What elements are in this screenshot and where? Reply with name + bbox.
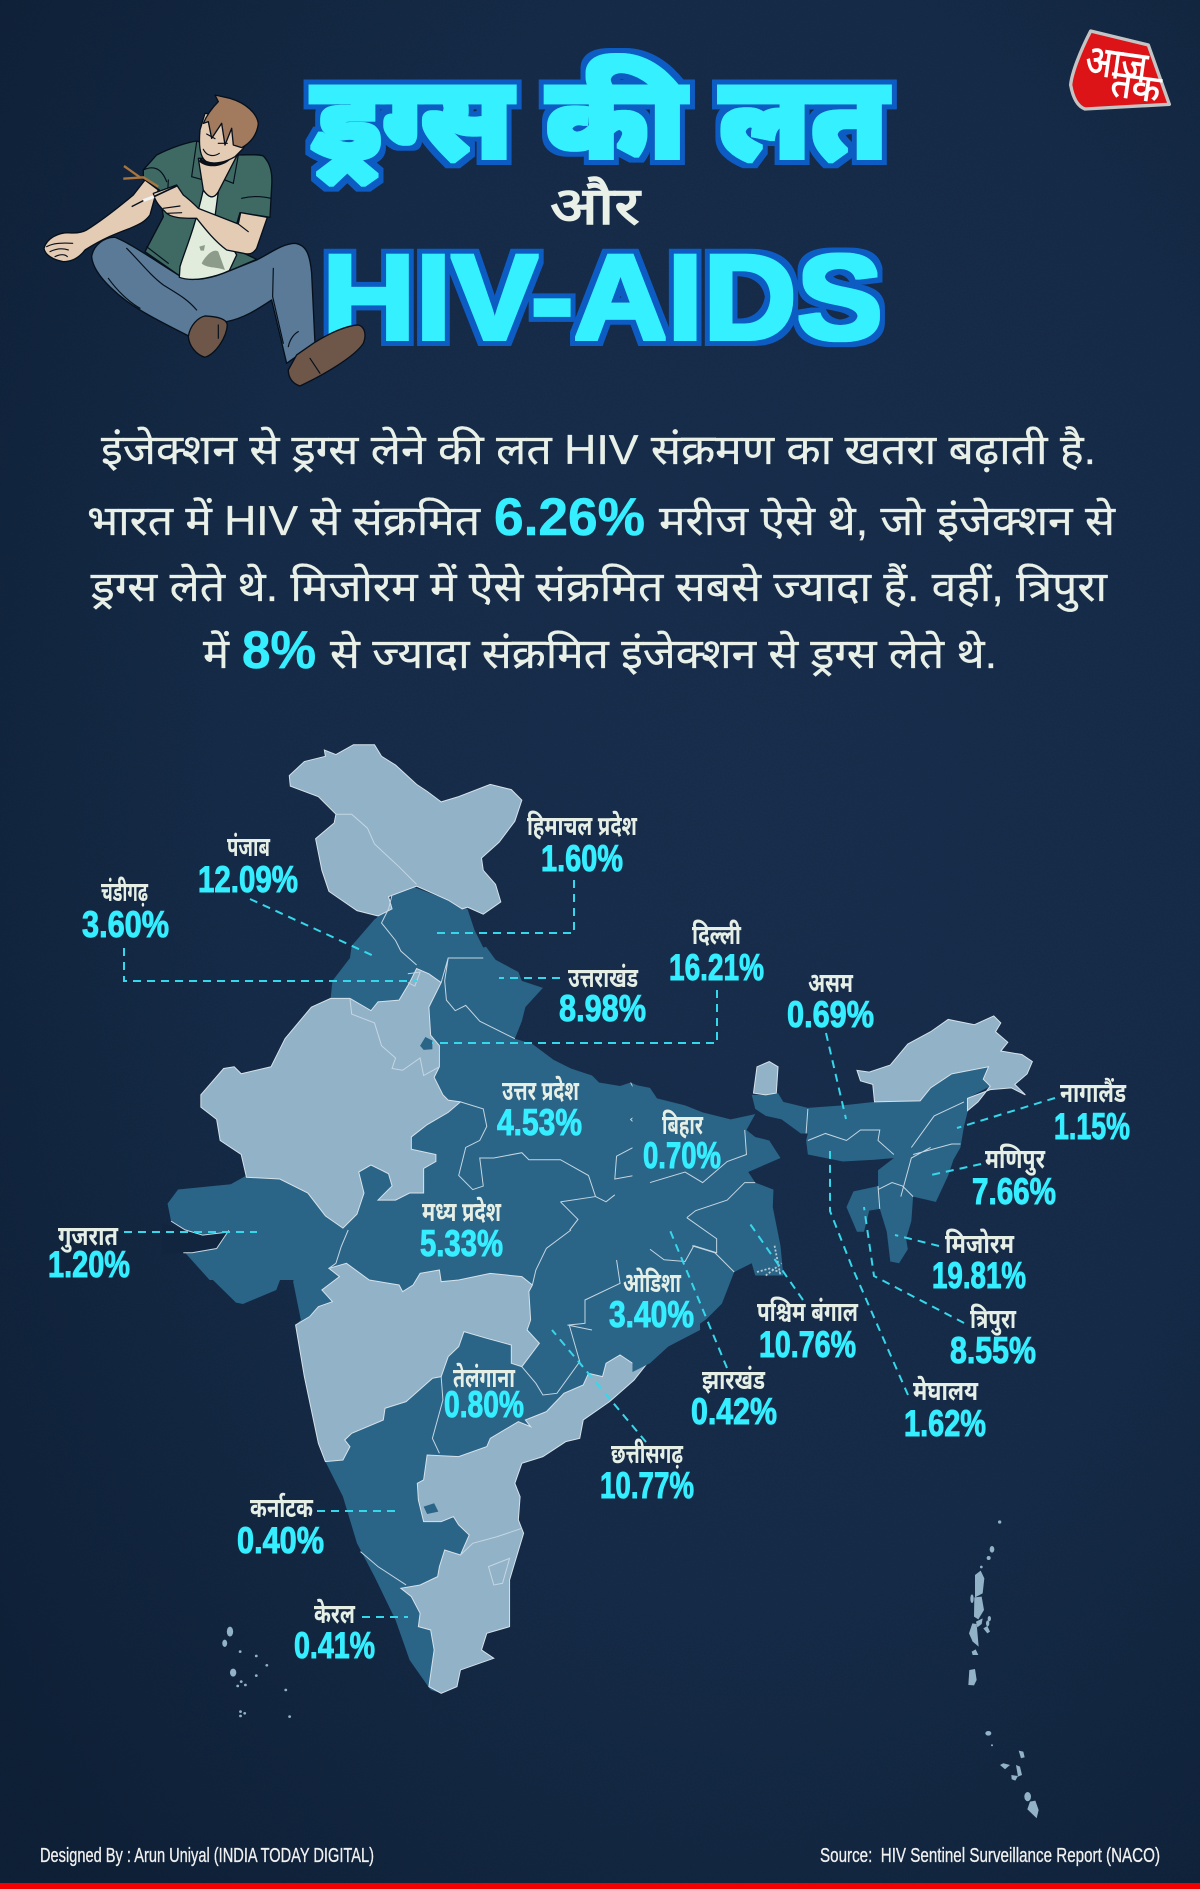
label: Uttarakhand: उत्तराखंड (568, 963, 638, 993)
label: Manipur (972, 1144, 1056, 1212)
label: Gujarat (48, 1221, 130, 1285)
collar shadow (199, 156, 233, 166)
label: Telangana (444, 1362, 524, 1425)
label: Himachal Pradesh: हिमाचल प्रदेश (527, 810, 637, 841)
logo word: Aaj: आज (1083, 36, 1151, 93)
syringe (132, 197, 153, 207)
label: Punjab: 12.09% (198, 859, 298, 900)
label: Delhi (669, 920, 764, 988)
light: Arunachal Pradesh (857, 1016, 1032, 1111)
label: Mizoram (932, 1229, 1026, 1296)
hand creases (163, 206, 248, 232)
label: West Bengal: पश्चिम बंगाल (757, 1297, 859, 1327)
label: Assam: असम (808, 968, 853, 998)
Delhi (420, 1037, 432, 1050)
label: Karnataka: कर्नाटक (250, 1492, 313, 1523)
label: Bihar (643, 1110, 721, 1176)
light: Sikkim (753, 1062, 778, 1095)
label: Himachal Pradesh: 1.60% (541, 838, 623, 879)
label: Uttar Pradesh (497, 1075, 582, 1143)
label: Chhattisgarh (600, 1439, 694, 1506)
fingers (47, 243, 73, 257)
title: HIV-AIDS: HIV-AIDS (322, 229, 883, 365)
label: Kerala: 0.41% (294, 1625, 375, 1666)
paragraph line 4: में (203, 630, 230, 677)
paragraph line 2: 6.26% (494, 488, 645, 547)
right shoe (288, 325, 365, 386)
arm with tourniquet (44, 180, 158, 262)
Sundarbans detail (757, 1246, 782, 1276)
label: Chhattisgarh: 10.77% (600, 1465, 694, 1506)
label: Mizoram: मिजोरम (945, 1229, 1014, 1259)
jeans folds (108, 248, 298, 347)
paragraph line 4: 8% (242, 621, 316, 680)
dark states: south (184, 1230, 700, 1718)
label: Delhi: दिल्ली (692, 920, 742, 950)
label: Manipur: मणिपुर (985, 1144, 1046, 1175)
neck (198, 155, 237, 197)
logo: Aaj Tak (1071, 31, 1169, 111)
label: Uttarakhand (559, 963, 646, 1029)
label: Gujarat: गुजरात (58, 1221, 119, 1252)
shirt details (143, 142, 271, 263)
label: Nagaland: नागालैंड (1060, 1077, 1126, 1108)
label: Himachal Pradesh (527, 810, 637, 879)
label: Madhya Pradesh (420, 1196, 503, 1264)
paragraph line 2 (87, 488, 1116, 547)
paragraph line 4: से ज्यादा संक्रमित इंजेक्शन से ड्रग्स लेते थे. (330, 630, 997, 677)
gulf of Kutch (162, 1221, 230, 1254)
state borders north (336, 814, 683, 1280)
label: Kerala: केरल (314, 1598, 356, 1629)
label: Chandigarh: 3.60% (82, 904, 169, 945)
label: Madhya Pradesh: मध्य प्रदेश (422, 1196, 501, 1227)
label: Odisha: ओडिशा (623, 1268, 682, 1298)
label: Kerala (294, 1598, 375, 1666)
light: Andhra Pradesh and Tamil Nadu (401, 1353, 655, 1693)
label: Assam (787, 968, 874, 1035)
undershirt (179, 190, 237, 279)
paragraph line 2: मरीज ऐसे थे, जो इंजेक्शन से (659, 497, 1116, 544)
jeans (92, 237, 315, 363)
label: Jharkhand (691, 1365, 777, 1432)
footer: designer credit: Designed By : Arun Uniyal (INDIA TODAY DIGITAL) (40, 1845, 374, 1867)
label: Chandigarh: चंडीगढ़ (101, 877, 148, 907)
label: Odisha: 3.40% (609, 1294, 694, 1335)
state borders south (329, 1230, 620, 1585)
label: Telangana: तेलंगाना (453, 1362, 516, 1393)
label: Karnataka (237, 1492, 324, 1561)
label: Punjab (198, 832, 298, 900)
shirt (143, 141, 272, 275)
label: Odisha (609, 1268, 694, 1335)
hair (203, 95, 258, 148)
forearm and hand (153, 185, 267, 254)
label: Meghalaya: मेघालय (913, 1375, 979, 1406)
state borders east (650, 1102, 964, 1272)
logo badge (1071, 31, 1169, 109)
label: Mizoram: 19.81% (932, 1255, 1026, 1296)
tourniquet strap (123, 166, 158, 187)
label: Uttar Pradesh: उत्तर प्रदेश (502, 1075, 579, 1106)
label: Jharkhand: 0.42% (691, 1391, 777, 1432)
label: Uttarakhand: 8.98% (559, 988, 646, 1029)
light: Rajasthan Haryana (201, 969, 460, 1228)
label: Tripura: 8.55% (950, 1330, 1036, 1371)
label: Tripura: त्रिपुरा (970, 1304, 1017, 1335)
light: Maharashtra (296, 1263, 539, 1462)
label: Manipur: 7.66% (972, 1171, 1056, 1212)
label: Assam: 0.69% (787, 994, 874, 1035)
label: Nagaland (1054, 1077, 1130, 1147)
illustration: man injecting drugs (44, 95, 365, 386)
label: Punjab: पंजाब (227, 832, 271, 862)
Lakshadweep islands (222, 1627, 291, 1718)
label: Meghalaya (904, 1375, 986, 1444)
title: drug addiction: ड्रग्स की लत (310, 54, 890, 186)
light: Jammu Kashmir and Ladakh (289, 745, 522, 916)
label: Meghalaya: 1.62% (904, 1403, 986, 1444)
label: Chhattisgarh: छत्तीसगढ़ (611, 1439, 684, 1469)
label: Bihar: 0.70% (643, 1135, 721, 1176)
label: Karnataka: 0.40% (237, 1520, 324, 1561)
label: Nagaland: 1.15% (1054, 1106, 1130, 1147)
bottom red bar (0, 1883, 1200, 1889)
map of India (124, 745, 1055, 1818)
leader lines (124, 880, 1055, 1617)
face (199, 113, 253, 163)
shoe creases (218, 325, 320, 373)
left shoe (188, 316, 227, 357)
label: Madhya Pradesh: 5.33% (420, 1223, 503, 1264)
logo word: Tak: तक (1108, 62, 1165, 111)
dark states: east and north-east (632, 1016, 1032, 1372)
label: Chandigarh (82, 877, 169, 945)
title connector: and: और (550, 178, 642, 236)
intro paragraph (87, 426, 1116, 680)
Andaman and Nicobar islands (968, 1520, 1039, 1818)
stain on undershirt (199, 245, 225, 270)
label: Tripura (950, 1304, 1036, 1371)
label: Telangana: 0.80% (444, 1384, 524, 1425)
Hyderabad (424, 1503, 438, 1514)
label: Jharkhand: झारखंड (702, 1365, 765, 1395)
label: Gujarat: 1.20% (48, 1244, 130, 1285)
label: West Bengal: 10.76% (759, 1324, 856, 1365)
label: Bihar: बिहार (662, 1110, 704, 1140)
face features (203, 134, 227, 156)
dark states: north and centre (168, 745, 700, 1280)
paragraph line 3: ड्रग्स लेते थे. मिजोरम में ऐसे संक्रमित सबसे ज्यादा हैं. वहीं, त्रिपुरा (90, 563, 1108, 612)
paragraph line 1: इंजेक्शन से ड्रग्स लेने की लत HIV संक्रमण का खतरा बढ़ाती है. (101, 426, 1096, 473)
paragraph line 2: भारत में HIV से संक्रमित (87, 497, 481, 544)
paragraph line 4 (203, 621, 997, 680)
label: Uttar Pradesh: 4.53% (497, 1102, 582, 1143)
label: West Bengal (757, 1297, 859, 1365)
label: Delhi: 16.21% (669, 947, 764, 988)
